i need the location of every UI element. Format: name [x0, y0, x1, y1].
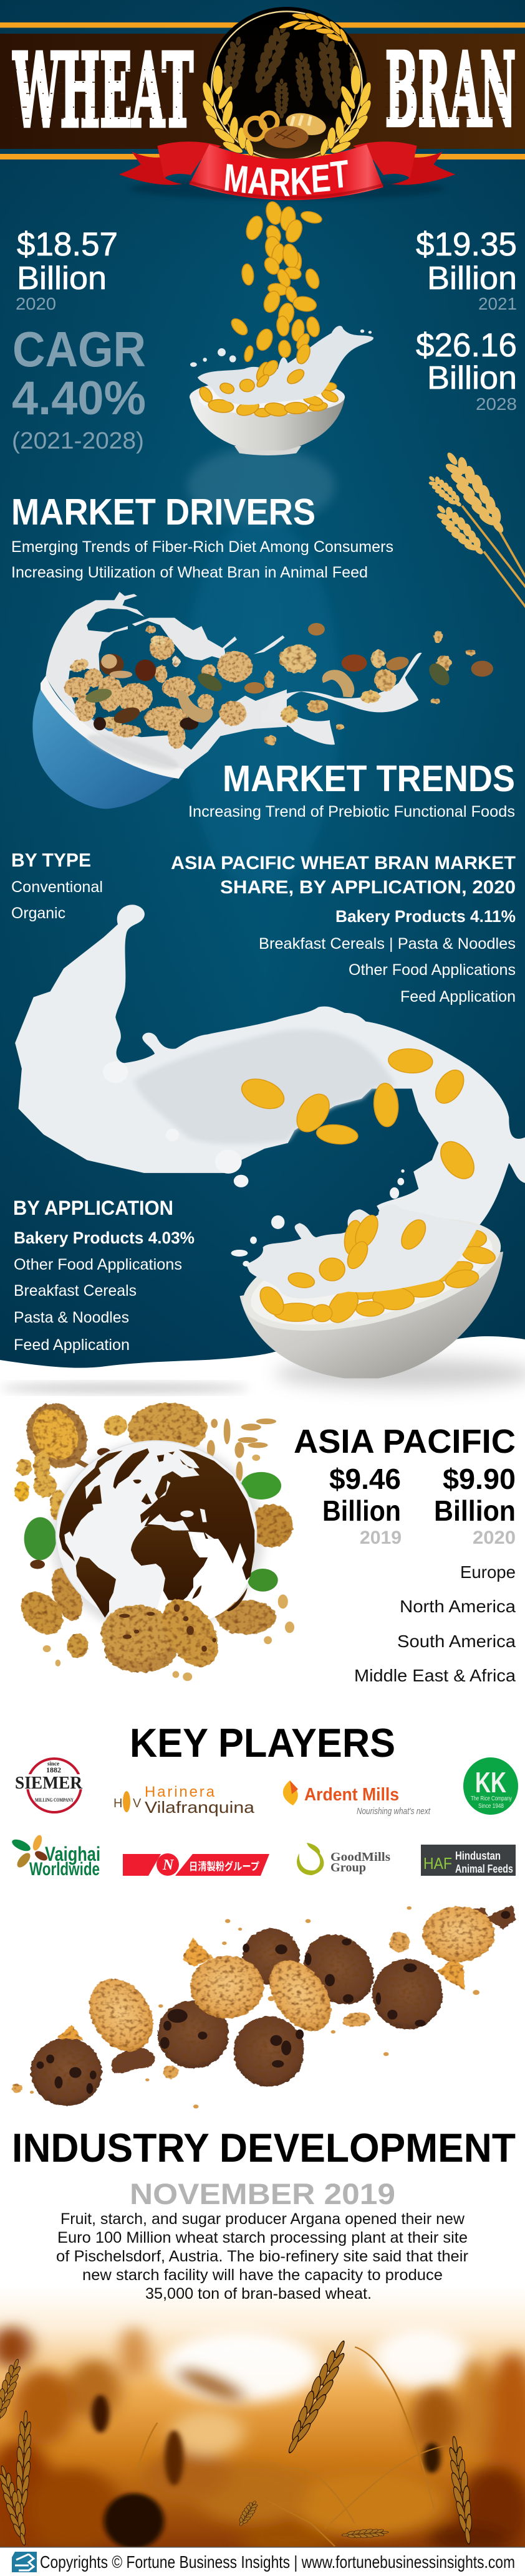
list: by type	[11, 849, 103, 922]
illustration: top cereal bowl with milk splash	[190, 326, 373, 455]
milk stream to the right	[268, 653, 422, 723]
list: other regions: Europe	[460, 1562, 516, 1582]
text block: development description: new starch facility will have the capacity to produce	[82, 2266, 443, 2284]
heading: market drivers: MARKET DRIVERS	[11, 492, 315, 533]
logo: KK rice company: Since 1948	[478, 1803, 504, 1810]
list: by application: Other Food Applications	[14, 1256, 182, 1273]
panel: teal background	[0, 0, 525, 1371]
milk crescent	[46, 592, 287, 769]
British Isles	[142, 1493, 152, 1504]
logo: Nisshin group: 日清製粉グループ	[189, 1860, 259, 1873]
list: other regions: North America	[400, 1597, 516, 1616]
list: by application: Pasta & Noodles	[14, 1309, 129, 1326]
text block: development description: Fruit, starch, and sugar producer Argana opened their new	[60, 2210, 465, 2228]
list: other regions	[354, 1562, 516, 1685]
granola	[64, 626, 253, 749]
heading: market trends: Increasing Trend of Prebiotic Functional Foods	[188, 803, 515, 820]
list: Asia Pacific share by application: SHARE, BY APPLICATION, 2020	[220, 877, 516, 898]
globe	[56, 1441, 257, 1627]
logo: Harinera Vilafranquina: Harinera	[145, 1784, 215, 1800]
heading: Asia Pacific: ASIA PACIFIC	[294, 1423, 516, 1460]
list: Asia Pacific share by application: Feed Application	[400, 988, 516, 1005]
list: by application	[13, 1197, 195, 1354]
icon: Fortune Business Insights logo	[12, 2552, 37, 2572]
banner: red ribbon	[119, 141, 455, 204]
heading: key players: KEY PLAYERS	[130, 1720, 395, 1766]
text block: development description: Euro 100 Million wheat starch processing plant at their site	[57, 2229, 468, 2246]
illustration: globe surrounded by cookies	[12, 1397, 294, 1681]
bowl rim	[41, 676, 185, 779]
stat: 2020: $9.90	[443, 1463, 516, 1495]
North America	[59, 1450, 123, 1562]
logo: Ardent Mills: Nourishing what's next	[357, 1806, 431, 1817]
stat: 2020	[434, 1463, 516, 1548]
stat: 2028 market size: 2028	[476, 394, 517, 414]
stat: 2028 market size: $26.16	[416, 327, 517, 364]
logo: Vaighai Worldwide: Worldwide	[29, 1859, 100, 1880]
Australia edge	[226, 1587, 248, 1612]
Iceland	[133, 1480, 142, 1483]
stat: CAGR	[12, 321, 146, 454]
logo: GoodMills Group: GoodMills	[330, 1850, 390, 1864]
bowl	[239, 1252, 503, 1378]
logo: Hindustan Animal Feeds: Hindustan	[455, 1850, 501, 1862]
Madagascar	[192, 1585, 201, 1599]
Africa	[131, 1524, 208, 1601]
crown of milk	[246, 1204, 479, 1298]
icon: wheat and bread emblem	[200, 7, 373, 161]
logo: Hindustan Animal Feeds	[421, 1845, 516, 1876]
logo: GoodMills Group: Group	[330, 1861, 366, 1875]
upper splash	[132, 618, 237, 660]
list: by type: BY TYPE	[11, 849, 91, 871]
panel: title banner: WHEAT	[12, 32, 193, 150]
illustration: large milk splash with bowl and flakes	[15, 905, 525, 1378]
logo: Vaighai Worldwide	[11, 1834, 100, 1880]
stat: 2019	[322, 1463, 402, 1548]
logo: KK rice company: KK	[475, 1766, 506, 1799]
icon: long bread	[284, 110, 328, 138]
Eurasia	[140, 1450, 254, 1580]
stat: 2020 market size: $18.57	[17, 226, 118, 263]
golden wheat arc	[278, 11, 350, 45]
icon: pretzel	[245, 113, 277, 140]
logo: KK rice company: The Rice Company	[471, 1795, 512, 1802]
logo: Nisshin group: N	[162, 1857, 175, 1873]
panel: footer	[0, 2547, 525, 2576]
list: by application: Feed Application	[14, 1336, 130, 1354]
stat: 2020 market size: Billion	[17, 260, 107, 297]
illustration: granola bowl with milk splash	[32, 592, 493, 809]
logo: Siemer: MILLING COMPANY	[35, 1797, 74, 1803]
logo: Siemer: since	[47, 1761, 59, 1767]
flowing milk	[15, 905, 525, 1249]
stat: CAGR: 4.40%	[12, 372, 146, 425]
icon: golden wheat sprigs	[423, 446, 525, 612]
list: by application: BY APPLICATION	[13, 1197, 173, 1219]
list: Asia Pacific share by application: Bakery Products 4.11%	[335, 907, 516, 926]
logo: GoodMills Group	[297, 1843, 390, 1875]
logo: Siemer: SIEMER	[15, 1774, 83, 1793]
list: by type: Organic	[11, 905, 65, 922]
stat: 2019: 2019	[360, 1528, 402, 1548]
stat: 2020: Billion	[434, 1495, 516, 1527]
heading: Asia Pacific	[294, 1423, 516, 1685]
date: November 2019: NOVEMBER 2019	[130, 2177, 395, 2210]
logo: KK rice company	[463, 1757, 518, 1815]
stat: 2021 market size: $19.35	[416, 226, 517, 263]
illustration: flying cookies	[12, 1905, 515, 2109]
list: other regions: South America	[397, 1632, 516, 1651]
stat: 2028 market size	[416, 327, 517, 414]
blue bowl	[32, 690, 185, 809]
flying pieces	[265, 630, 476, 745]
logo: Harinera Vilafranquina: V	[133, 1797, 142, 1810]
stat: 2021 market size: 2021	[478, 294, 517, 313]
oat sprig	[207, 1419, 276, 1481]
milk splash	[198, 326, 373, 405]
logo: Nisshin group	[123, 1853, 269, 1876]
South America	[76, 1556, 116, 1618]
logo: Harinera Vilafranquina	[113, 1784, 255, 1817]
stat: 2021 market size	[416, 226, 517, 313]
list: other regions: Middle East & Africa	[354, 1666, 516, 1685]
label: MARKET: MARKET	[222, 151, 350, 204]
list: Asia Pacific share by application: ASIA PACIFIC WHEAT BRAN MARKET	[171, 853, 516, 873]
photo: wheat field	[0, 2286, 525, 2554]
logo: Hindustan Animal Feeds: HAF	[423, 1854, 452, 1873]
text block: development description: 35,000 ton of bran-based wheat.	[145, 2285, 372, 2303]
list: Asia Pacific share by application	[171, 853, 516, 1005]
nuts	[112, 705, 142, 726]
stat: CAGR: CAGR	[12, 321, 146, 377]
stat: CAGR: (2021-2028)	[12, 428, 144, 454]
logo: Siemer	[14, 1759, 83, 1812]
cookies in front	[101, 1592, 229, 1674]
stat: 2021 market size: Billion	[427, 260, 517, 297]
logo: Ardent Mills: Ardent Mills	[304, 1785, 399, 1805]
logo: Harinera Vilafranquina: Vilafranquina	[145, 1798, 255, 1817]
stat: 2019: Billion	[322, 1495, 401, 1527]
Greenland	[113, 1448, 149, 1489]
panel: white lower section with wave edge	[0, 1336, 525, 2576]
icon: round loaf	[264, 126, 309, 148]
list: Asia Pacific share by application: Breakfast Cereals | Pasta & Noodles	[259, 935, 516, 953]
logo: Vaighai Worldwide: Vaighai	[45, 1843, 100, 1865]
heading: market drivers: Emerging Trends of Fiber-Rich Diet Among Consumers	[11, 538, 393, 556]
list: by application: Breakfast Cereals	[14, 1282, 137, 1300]
stat: 2020: 2020	[473, 1528, 516, 1548]
stat: 2020 market size: 2020	[16, 294, 56, 313]
heading: industry development: INDUSTRY DEVELOPMENT	[12, 2125, 516, 2170]
heading: market trends	[188, 758, 515, 820]
flakes in bowl	[256, 1230, 498, 1327]
text block: development description: of Pischelsdorf, Austria. The bio-refinery site said that their	[56, 2248, 468, 2265]
flakes in the air	[236, 1047, 481, 1184]
list: by type: Conventional	[11, 878, 103, 896]
stat: 2019: $9.46	[329, 1463, 401, 1495]
illustration: falling cereal flakes	[228, 201, 324, 362]
stat: 2028 market size: Billion	[427, 360, 517, 396]
logo: Ardent Mills	[283, 1780, 431, 1817]
list: by application: Bakery Products 4.03%	[14, 1229, 195, 1247]
text block: development description	[56, 2210, 468, 2303]
heading: market drivers: Increasing Utilization of Wheat Bran in Animal Feed	[11, 564, 368, 581]
list: Asia Pacific share by application: Other Food Applications	[349, 961, 516, 979]
heading: market drivers	[11, 492, 393, 581]
logo: Harinera Vilafranquina: H	[113, 1797, 122, 1810]
logo: Siemer: 1882	[46, 1766, 61, 1774]
stat: 2020 market size	[16, 226, 118, 313]
